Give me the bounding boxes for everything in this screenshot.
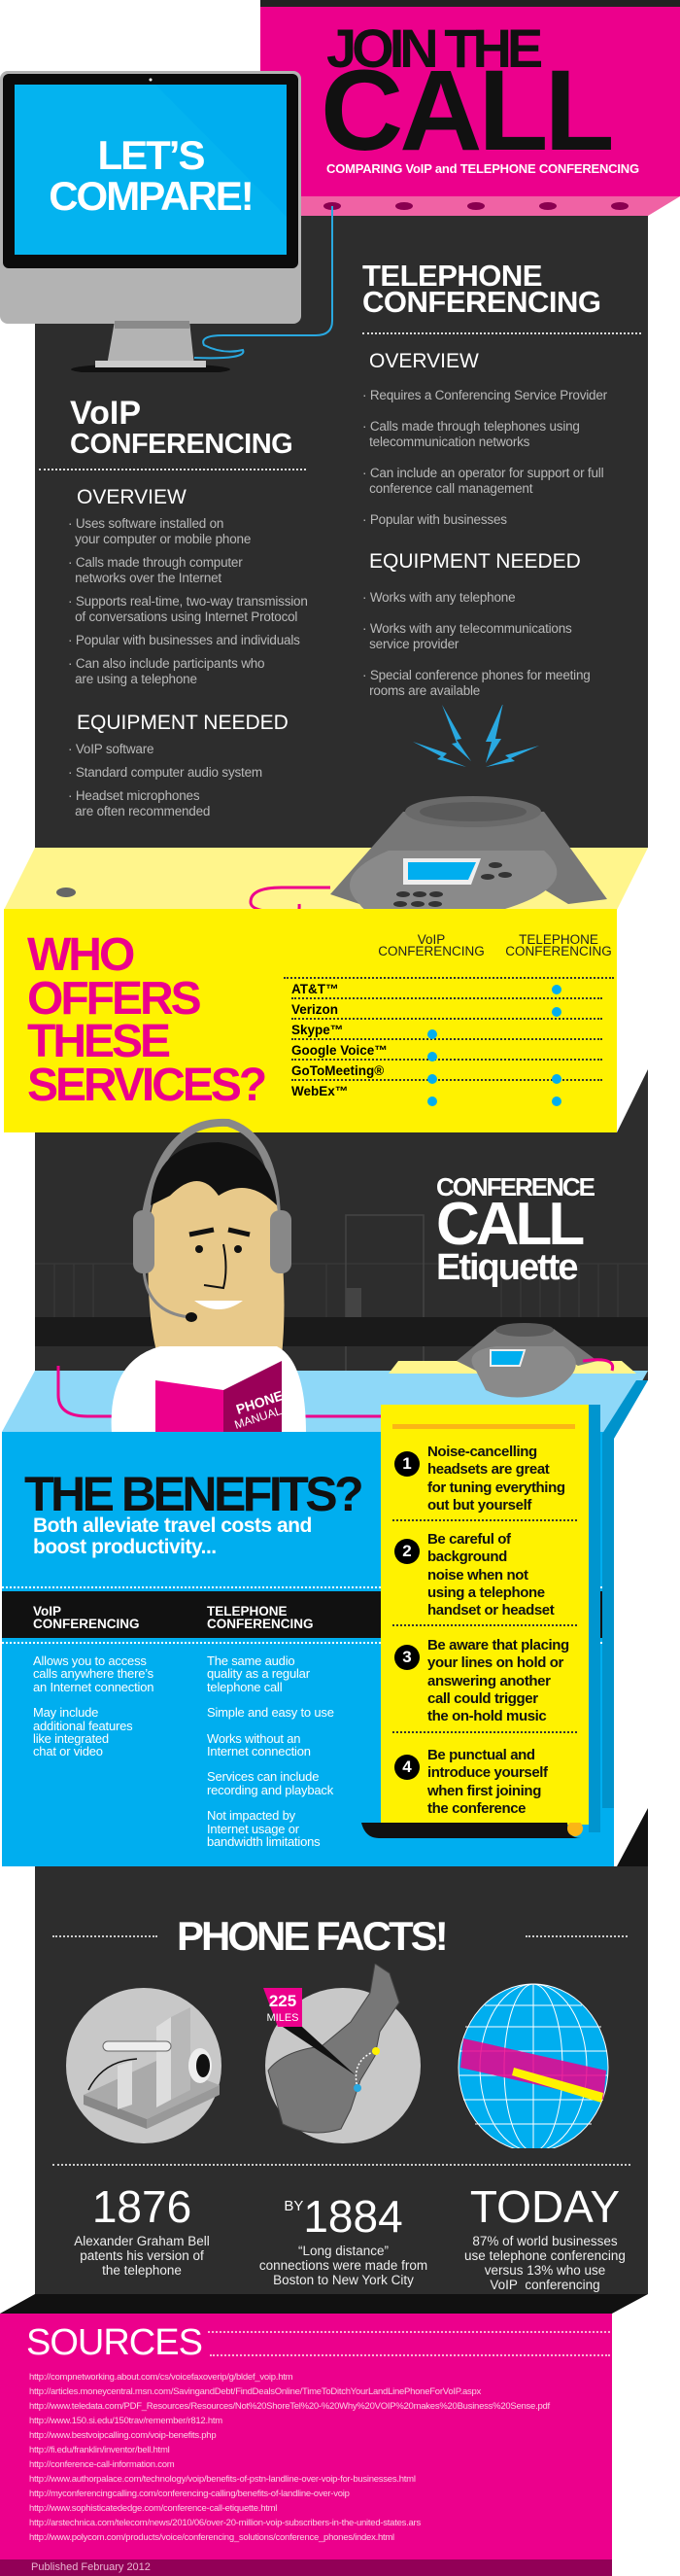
heading: telephone conferencing [362, 259, 600, 319]
panel: phone facts [35, 1866, 648, 2294]
fact: today: versus 13% who use [485, 2263, 605, 2278]
tip 2: noise when not [427, 1567, 528, 1584]
text block: telephone overview: OVERVIEW [369, 350, 479, 372]
heading: THE BENEFITS? [24, 1467, 360, 1521]
text: telecommunication networks [369, 435, 529, 449]
icon: monitor with LET'S COMPARE: COMPARE! [49, 173, 253, 219]
text block: VoIP benefits: an Internet connection [33, 1680, 153, 1694]
subtitle: COMPARING VoIP and TELEPHONE CONFERENCING [326, 161, 639, 176]
text: · Works with any telephone [362, 590, 515, 605]
table: GoToMeeting® [291, 1063, 384, 1078]
dark comparison panel [35, 216, 648, 848]
icon: man with headset and phone manual [111, 1118, 306, 1432]
tip 1: 1 [402, 1454, 412, 1473]
text block: telephone benefits: Not impacted by [207, 1808, 295, 1823]
fact: 1876: the telephone [102, 2263, 182, 2278]
text block: source urls: http://compnetworking.about.com/cs/voicefaxoverip/g/bldef_voip.htm [29, 2372, 292, 2383]
subtitle: boost productivity... [33, 1536, 217, 1558]
table: Google Voice™ [291, 1043, 388, 1058]
tip 4: when first joining [427, 1783, 541, 1799]
icon: globe [459, 1983, 608, 2148]
tip 2: background [427, 1549, 507, 1565]
text: are using a telephone [75, 672, 197, 686]
tip 4: the conference [427, 1800, 526, 1817]
tip 3: call could trigger [427, 1690, 538, 1707]
heading: SERVICES? [27, 1060, 264, 1110]
text block: source urls: http://articles.moneycentral.msn.com/SavingandDebt/FindDealsOnline/TimeToDitchYourLandLinePhoneForVoIP.aspx [29, 2386, 481, 2397]
text: conference call management [369, 481, 532, 496]
text block: VoIP benefits: calls anywhere there’s [33, 1666, 153, 1681]
text: · Can also include participants who [68, 656, 264, 671]
fact: today: VoIP conferencing [490, 2278, 600, 2292]
text: · Can include an operator for support or full [362, 466, 603, 480]
tip 3: your lines on hold or [427, 1654, 563, 1671]
fact: 1876: patents his version of [80, 2248, 204, 2263]
text block: telephone benefits [207, 1654, 334, 1849]
tip 1: out but yourself [427, 1497, 531, 1514]
heading: VoIP conferencing: CONFERENCING [70, 429, 292, 460]
tip 3: answering another [427, 1673, 551, 1689]
subtitle: Both alleviate travel costs and [33, 1514, 312, 1537]
panel: etiquette tips card [381, 1405, 589, 1825]
text: · Headset microphones [68, 788, 199, 803]
column headers [33, 1604, 140, 1631]
icon: monitor with LET'S COMPARE [0, 71, 301, 372]
text: · Special conference phones for meeting [362, 668, 591, 682]
heading: conference call etiquette: CALL [436, 1191, 581, 1258]
tip 1: for tuning everything [427, 1479, 565, 1496]
tip 2: using a telephone [427, 1584, 545, 1601]
yellow platform [4, 848, 648, 910]
tip 3: the on-hold music [427, 1708, 546, 1724]
subtitle [33, 1514, 312, 1558]
text: service provider [369, 637, 459, 651]
table: WebEx™ [291, 1084, 348, 1098]
icon: small phone on yellow note [389, 1323, 636, 1398]
text block: VoIP overview: OVERVIEW [77, 486, 187, 508]
header: pink title block [260, 0, 680, 216]
text: · Uses software installed on [68, 516, 223, 531]
fact: 1876: Alexander Graham Bell [74, 2234, 210, 2248]
table: CONFERENCING [378, 944, 485, 958]
cable: blue monitor [194, 206, 333, 360]
table: VoIP [418, 932, 445, 947]
text: · Popular with businesses and individuals [68, 633, 300, 647]
heading: PHONE FACTS! [177, 1913, 446, 1959]
text block: source urls: http://www.teledata.com/PDF_Resources/Resources/Not%20ShoreTel%20-%20Why%20VOIP%20makes%20Business%20Sense.pdf [29, 2401, 550, 2412]
icon: monitor with LET'S COMPARE: LET’S [97, 132, 204, 178]
text block: VoIP benefits [33, 1654, 153, 1758]
fact: 1884 [259, 2191, 427, 2287]
text block: telephone benefits: recording and playback [207, 1783, 333, 1797]
text: are often recommended [75, 804, 210, 818]
table: TELEPHONE [519, 932, 598, 947]
text block: source urls: http://www.150.si.edu/150trav/remember/r812.htm [29, 2416, 222, 2426]
text block: telephone benefits: bandwidth limitations [207, 1834, 320, 1849]
icon: east coast map with 225 miles: 225 [269, 1992, 296, 2010]
text block: VoIP benefits: May include [33, 1705, 98, 1720]
column headers: VoIP [33, 1604, 61, 1619]
tip 3 [394, 1637, 569, 1724]
text: · Supports real-time, two-way transmission [68, 594, 308, 609]
text: of conversations using Internet Protocol [75, 609, 297, 624]
panel: sources [0, 2294, 648, 2576]
title: JOIN THE [326, 17, 538, 79]
text: · Works with any telecommunications [362, 621, 572, 636]
text block: telephone benefits: telephone call [207, 1680, 282, 1694]
tip 4: introduce yourself [427, 1764, 548, 1781]
panel: etiquette room background [35, 1132, 648, 1380]
text block: telephone equipment: EQUIPMENT NEEDED [369, 550, 581, 573]
tip 1 [394, 1444, 565, 1514]
table [284, 932, 614, 1106]
footer: Published February 2012 [31, 2561, 151, 2573]
heading: WHO [27, 929, 132, 981]
blue desk top surface [2, 1366, 648, 1432]
tip 1: Noise-cancelling [427, 1444, 537, 1460]
tip 2: handset or headset [427, 1602, 554, 1619]
text block: telephone benefits: The same audio [207, 1654, 294, 1668]
text block: source urls: http://arstechnica.com/telecom/news/2010/06/over-20-million-voip-subscribers-in-the-united-states.ars [29, 2518, 421, 2528]
table: Skype™ [291, 1023, 343, 1037]
fact: today: TODAY [470, 2181, 620, 2232]
panel: the benefits: CONFERENCING [207, 1617, 314, 1631]
text block: telephone benefits: quality as a regular [207, 1666, 310, 1681]
fact: 1884: connections were made from [259, 2258, 427, 2273]
heading: THESE [27, 1016, 168, 1067]
table: CONFERENCING [505, 944, 612, 958]
text block: source urls [29, 2372, 550, 2543]
heading: conference call etiquette: CONFERENCE [436, 1172, 594, 1201]
header: pink title block: CALL [321, 47, 611, 175]
icon: east coast map with 225 miles [263, 1964, 421, 2143]
tip 4: 4 [402, 1758, 412, 1776]
text block: source urls: http://www.polycom.com/products/voice/conferencing_solutions/conference_phones/index.html [29, 2532, 394, 2543]
tip 2: 2 [402, 1542, 412, 1560]
text block: VoIP benefits: additional features [33, 1719, 132, 1733]
fact: today [464, 2181, 626, 2292]
tip 4: Be punctual and [427, 1747, 535, 1763]
text: your computer or mobile phone [75, 532, 251, 546]
heading: VoIP conferencing [70, 395, 292, 460]
heading: conference call etiquette: Etiquette [436, 1247, 577, 1288]
fact: 1876 [74, 2181, 210, 2278]
table: Verizon [291, 1002, 338, 1017]
text block: source urls: http://conference-call-information.com [29, 2459, 174, 2470]
tip 3: 3 [402, 1648, 412, 1666]
panel: the benefits: TELEPHONE [207, 1604, 288, 1619]
text block: telephone benefits: Internet connection [207, 1744, 311, 1758]
text block: telephone benefits: Services can include [207, 1769, 319, 1784]
text block: telephone benefits: Works without an [207, 1731, 300, 1746]
icon: man with headset and phone manual: PHONE [234, 1387, 285, 1417]
table: AT&T™ [291, 982, 338, 996]
text: · Popular with businesses [362, 512, 507, 527]
tip 2: Be careful of [427, 1531, 511, 1548]
heading: conference call etiquette [436, 1172, 595, 1288]
fact: 1884: “Long distance” [298, 2244, 389, 2258]
text block: VoIP equipment: EQUIPMENT NEEDED [77, 712, 289, 734]
fact: today: use telephone conferencing [464, 2248, 626, 2263]
icon: conference phone with cable [56, 796, 607, 909]
fact: 1876: 1876 [92, 2181, 191, 2232]
text block: telephone benefits: Internet usage or [207, 1822, 299, 1836]
column headers: CONFERENCING [33, 1617, 140, 1631]
text: · Calls made through telephones using [362, 419, 580, 434]
text: rooms are available [369, 683, 480, 698]
fact: today: 87% of world businesses [472, 2234, 618, 2248]
text block: VoIP benefits: chat or video [33, 1744, 103, 1758]
heading: OFFERS [27, 972, 199, 1025]
tip 4 [394, 1747, 548, 1817]
text: · Requires a Conferencing Service Provider [362, 388, 607, 402]
heading: telephone conferencing: CONFERENCING [362, 285, 600, 319]
text block: source urls: http://fi.edu/franklin/inventor/bell.html [29, 2445, 169, 2455]
text: · VoIP software [68, 742, 153, 756]
panel: who offers these services [4, 909, 617, 1132]
fact: 1884: BY1884 [284, 2191, 403, 2242]
heading [27, 929, 264, 1110]
text block: VoIP benefits: like integrated [33, 1731, 109, 1746]
heading: telephone conferencing: TELEPHONE [362, 259, 542, 293]
text: networks over the Internet [75, 571, 221, 585]
tip 3: Be aware that placing [427, 1637, 569, 1654]
heading: SOURCES [26, 2322, 202, 2363]
tip 1: headsets are great [427, 1461, 549, 1478]
text block: telephone benefits: Simple and easy to use [207, 1705, 334, 1720]
icon: east coast map with 225 miles: MILES [266, 2012, 299, 2024]
text block: VoIP benefits: Allows you to access [33, 1654, 147, 1668]
heading: VoIP conferencing: VoIP [70, 395, 141, 432]
text block: source urls: http://www.authorpalace.com/technology/voip/benefits-of-pstn-landline-over-voip-for-businesses.html [29, 2474, 416, 2485]
icon: lightning bolts [413, 705, 539, 767]
icon: bell telephone [66, 1988, 221, 2143]
panel: the benefits [2, 1432, 614, 1866]
text block: source urls: http://myconferencingcalling.com/conferencing-calling/benefits-of-landline-over-voip [29, 2489, 350, 2499]
text: · Calls made through computer [68, 555, 243, 570]
text: · Standard computer audio system [68, 765, 262, 780]
tip 2 [394, 1531, 555, 1619]
text block: source urls: http://www.sophisticatededge.com/conference-call-etiquette.html [29, 2503, 277, 2514]
text block: source urls: http://www.bestvoipcalling.com/voip-benefits.php [29, 2430, 216, 2441]
fact: 1884: Boston to New York City [273, 2273, 414, 2287]
icon: man with headset and phone manual: MANUAL [233, 1404, 284, 1432]
